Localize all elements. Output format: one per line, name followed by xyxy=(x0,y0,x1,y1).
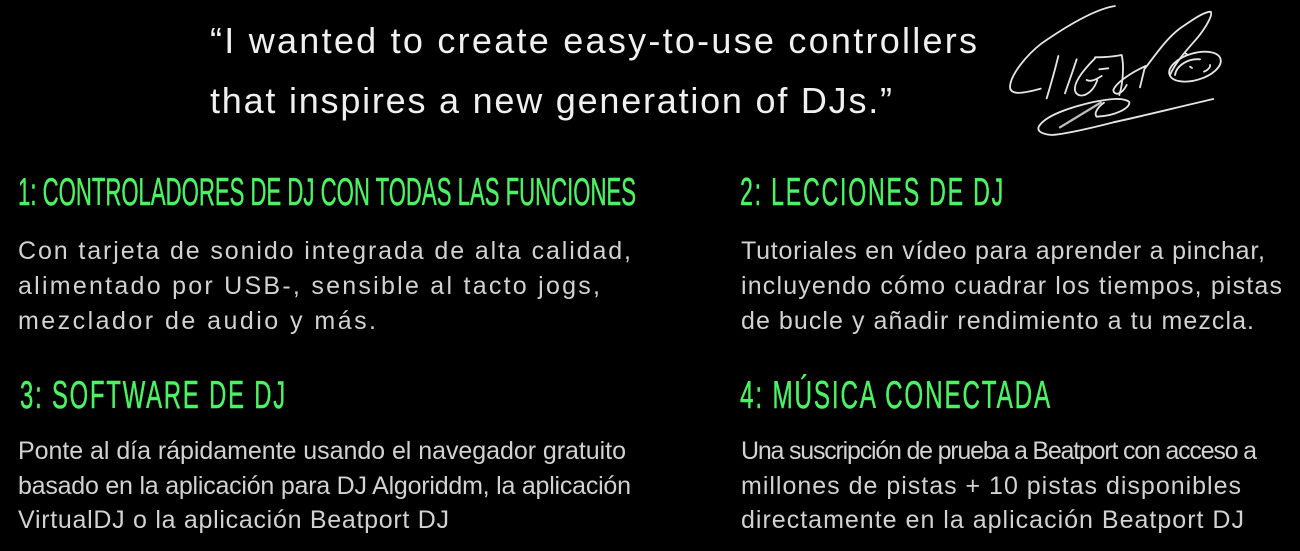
body text 3: basado en la aplicación para DJ Algoriddm, la aplicación xyxy=(18,472,631,500)
body text 3: Ponte al día rápidamente usando el navegador gratuito xyxy=(18,437,626,465)
body text 1: Con tarjeta de sonido integrada de alta calidad, xyxy=(18,237,631,265)
body text 4: directamente en la aplicación Beatport DJ xyxy=(741,506,1244,534)
body text 2: Tutoriales en vídeo para aprender a pinchar, xyxy=(741,237,1265,265)
heading 2: 2: LECCIONES DE DJ xyxy=(740,171,1005,214)
body text 2: de bucle y añadir rendimiento a tu mezcla. xyxy=(741,307,1254,335)
body text 4: millones de pistas + 10 pistas disponibles xyxy=(741,472,1241,500)
body text 4 xyxy=(741,437,1257,534)
body text 1: mezclador de audio y más. xyxy=(18,307,376,335)
section 1: controllers xyxy=(18,171,636,335)
body text 3: VirtualDJ o la aplicación Beatport DJ xyxy=(18,506,449,534)
section 3: software xyxy=(18,374,631,534)
body text 1 xyxy=(18,237,631,335)
body text 1: alimentado por USB-, sensible al tacto jogs, xyxy=(18,272,600,300)
section 4: connected music xyxy=(740,374,1257,534)
section 2: lessons xyxy=(740,171,1282,335)
body text 2 xyxy=(741,237,1282,335)
quote: “I wanted to create easy-to-use controllers xyxy=(210,20,977,61)
quote: that inspires a new generation of DJs.” xyxy=(210,80,892,121)
icon: handwritten signature xyxy=(1010,6,1224,135)
body text 3 xyxy=(18,437,631,534)
heading 3: 3: SOFTWARE DE DJ xyxy=(20,374,287,417)
heading 4: 4: MÚSICA CONECTADA xyxy=(740,374,1052,417)
heading 1: 1: CONTROLADORES DE DJ CON TODAS LAS FUNCIONES xyxy=(18,171,636,214)
body text 2: incluyendo cómo cuadrar los tiempos, pistas xyxy=(741,272,1282,300)
quote xyxy=(210,20,977,121)
body text 4: Una suscripción de prueba a Beatport con acceso a xyxy=(741,437,1257,465)
